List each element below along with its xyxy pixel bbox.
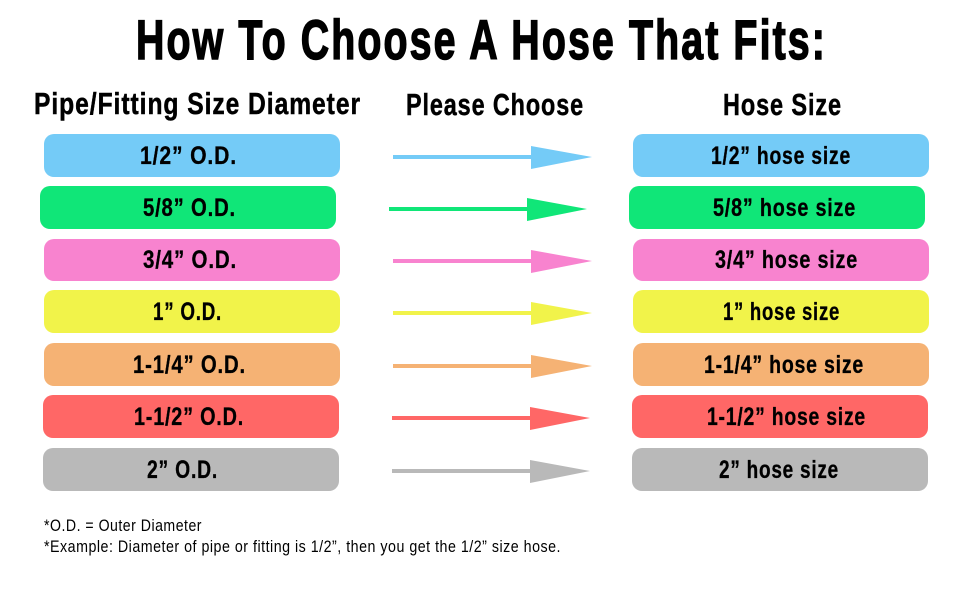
row: 1/2 inch — [44, 134, 929, 177]
row: 1/2 inch: 1/2” hose size — [711, 142, 851, 170]
row: 5/8 inch — [40, 186, 925, 229]
row: 2 inch — [43, 448, 928, 491]
row: 1-1/4 inch — [44, 343, 929, 386]
heading: hose size: Hose Size — [723, 87, 842, 122]
row: 2 inch: 2” hose size — [719, 456, 839, 484]
row: 5/8 inch: 5/8” O.D. — [143, 194, 236, 222]
heading: please choose: Please Choose — [406, 87, 584, 122]
row: 1 inch: 1” hose size — [723, 298, 840, 326]
footnotes: *Example: Diameter of pipe or fitting is 1/2”, then you get the 1/2” size hose. — [44, 537, 561, 556]
row: 3/4 inch — [44, 239, 929, 281]
row: 1/2 inch: 1/2” O.D. — [140, 142, 237, 170]
row: 1 inch — [44, 290, 929, 333]
row: 1-1/2 inch: 1-1/2” hose size — [707, 403, 866, 431]
row: 3/4 inch: 3/4” O.D. — [143, 246, 237, 274]
row: 1 inch: 1” O.D. — [153, 298, 222, 326]
footnotes: *O.D. = Outer Diameter — [44, 516, 202, 535]
footnotes — [44, 516, 561, 556]
row: 3/4 inch: 3/4” hose size — [715, 246, 858, 274]
row: 1-1/4 inch: 1-1/4” O.D. — [133, 351, 246, 379]
row: 1-1/2 inch — [43, 395, 928, 438]
row: 1-1/4 inch: 1-1/4” hose size — [704, 351, 864, 379]
row: 1-1/2 inch: 1-1/2” O.D. — [134, 403, 244, 431]
row: 5/8 inch: 5/8” hose size — [713, 194, 856, 222]
heading: pipe/fitting size diameter: Pipe/Fitting Size Diameter — [34, 86, 361, 121]
row: 2 inch: 2” O.D. — [147, 456, 218, 484]
